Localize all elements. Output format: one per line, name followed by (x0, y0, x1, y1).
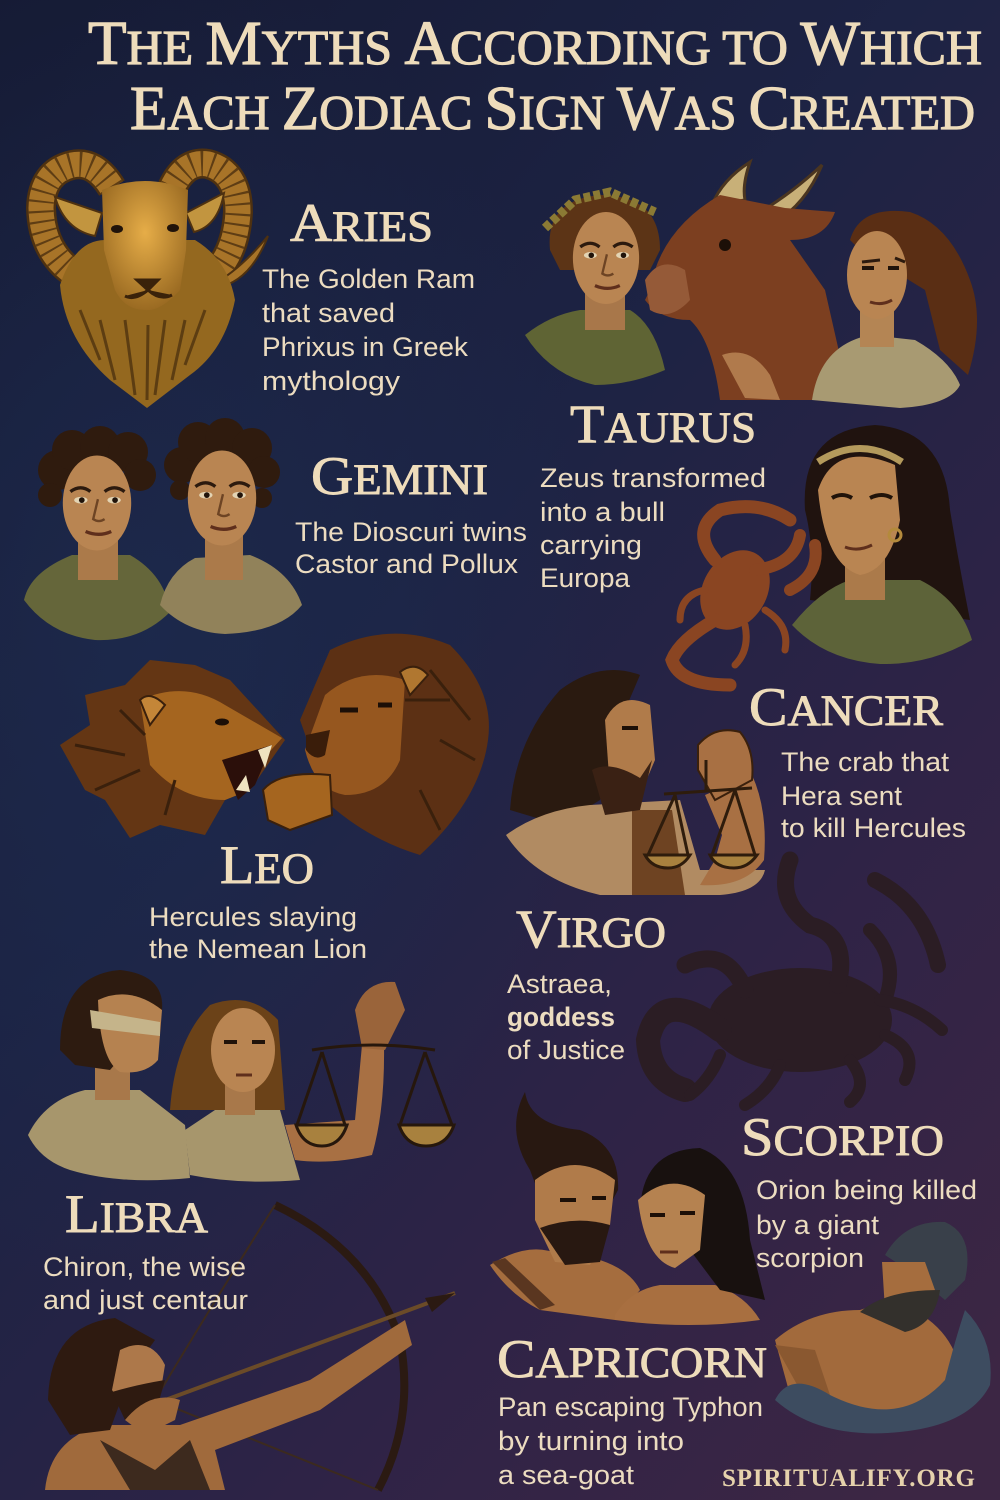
description: capricorn: by turning into (498, 1426, 684, 1456)
description: virgo: of Justice (507, 1035, 625, 1065)
heading: aries: ARIES (290, 193, 433, 253)
description: scorpio: Orion being killed (756, 1175, 977, 1205)
description: taurus: into a bull (540, 497, 665, 527)
panel: sagittarius illustration (45, 1205, 455, 1490)
description: scorpio: by a giant (756, 1210, 880, 1240)
heading: cancer: CANCER (749, 677, 943, 737)
heading: libra: LIBRA (65, 1184, 208, 1244)
description: cancer (781, 747, 966, 843)
description: libra: and just centaur (43, 1285, 248, 1315)
panel: gemini (24, 418, 527, 640)
description: capricorn: a sea-goat (498, 1460, 635, 1490)
title: EACH ZODIAC SIGN WAS CREATED (130, 75, 975, 143)
panel: leo (60, 634, 489, 964)
icon: dark giant crab silhouette (648, 860, 942, 1105)
heading: virgo: VIRGO (516, 899, 666, 959)
description: gemini (295, 517, 527, 579)
panel: capricorn (497, 1222, 991, 1490)
description: cancer: The crab that (781, 747, 950, 777)
description: taurus: carrying (540, 530, 642, 560)
description: aries (262, 264, 475, 396)
panel: cancer (672, 425, 972, 843)
description: cancer: Hera sent (781, 781, 903, 811)
illustration: golden ram (41, 164, 268, 408)
description: gemini: Castor and Pollux (295, 549, 519, 579)
description: leo (149, 902, 367, 964)
description: leo: Hercules slaying (149, 902, 357, 932)
description: aries: mythology (262, 366, 401, 396)
description: taurus: Europa (540, 563, 631, 593)
description: taurus (540, 463, 766, 593)
heading: taurus: TAURUS (570, 394, 756, 454)
description: aries: Phrixus in Greek (262, 332, 469, 362)
panel: virgo (506, 670, 942, 1105)
illustration: archer with bow (45, 1205, 455, 1490)
description: taurus: Zeus transformed (540, 463, 766, 493)
heading: gemini: GEMINI (311, 446, 488, 506)
description: scorpio: scorpion (756, 1243, 864, 1273)
description: cancer: to kill Hercules (781, 813, 966, 843)
illustration: Castor and Pollux twins (24, 418, 302, 640)
panel: libra (28, 970, 454, 1244)
illustration: two lions (60, 634, 489, 855)
panel: aries (41, 164, 475, 408)
description: aries: that saved (262, 298, 395, 328)
description: virgo (507, 969, 625, 1065)
description: virgo: goddess (507, 1002, 615, 1032)
panel: taurus (525, 162, 977, 593)
description: capricorn (498, 1392, 763, 1490)
description: capricorn: Pan escaping Typhon (498, 1392, 763, 1422)
description: libra (43, 1252, 248, 1315)
description: libra: Chiron, the wise (43, 1252, 246, 1282)
description: aries: The Golden Ram (262, 264, 475, 294)
description: scorpio (756, 1175, 977, 1273)
description: gemini: The Dioscuri twins (295, 517, 527, 547)
heading: leo: LEO (220, 835, 314, 895)
description: virgo: Astraea, (507, 969, 612, 999)
illustration: sea-god in waves (775, 1222, 991, 1433)
illustration: man holding scales (506, 670, 765, 895)
heading: scorpio: SCORPIO (741, 1107, 944, 1167)
heading: capricorn: CAPRICORN (497, 1329, 767, 1389)
title: THE MYTHS ACCORDING TO WHICH (88, 10, 982, 78)
title (88, 10, 982, 143)
illustration: youth, bull and Europa (525, 162, 977, 408)
panel: scorpio (490, 1092, 977, 1325)
illustration: Orion and companion (490, 1092, 765, 1325)
illustration: crowned Hera (672, 425, 972, 685)
footer: website: SPIRITUALIFY.ORG (722, 1465, 975, 1492)
illustration: blindfolded woman, second woman and scales (28, 970, 454, 1182)
description: leo: the Nemean Lion (149, 934, 367, 964)
icon: crab/scorpion creature (672, 507, 816, 685)
